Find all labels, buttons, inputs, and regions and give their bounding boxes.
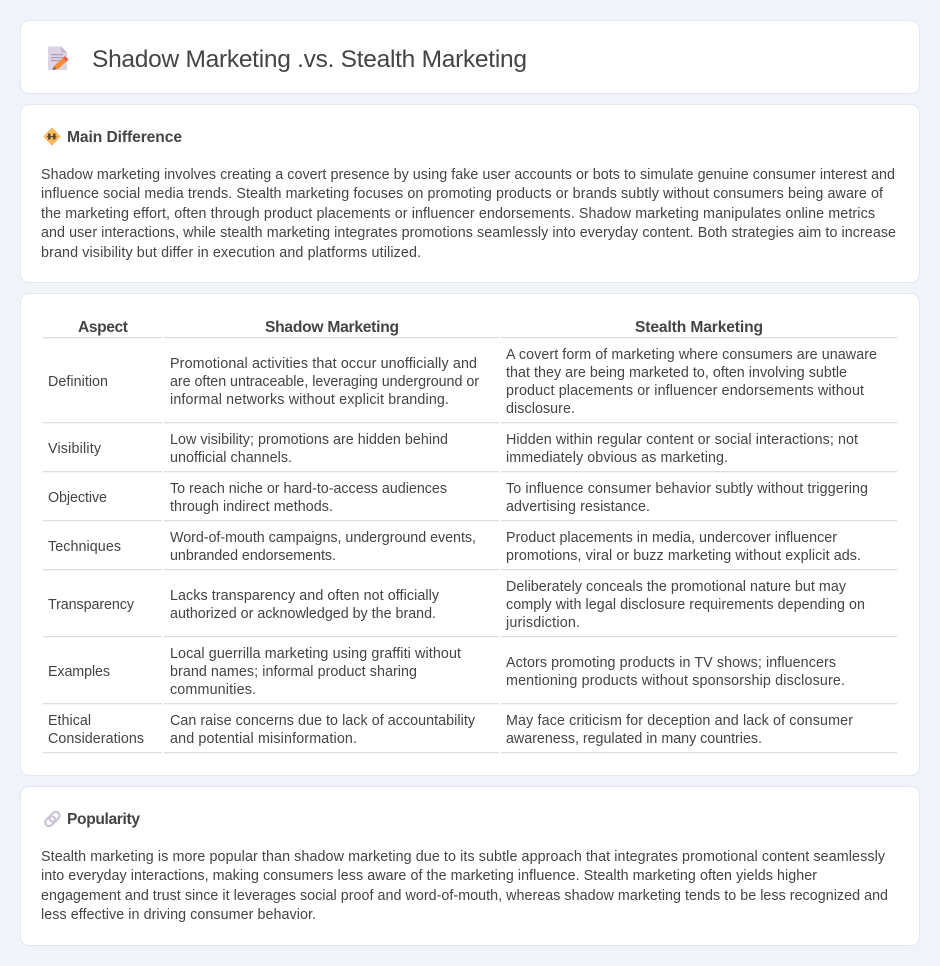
row: techniques: unbranded endorsements. (170, 548, 336, 564)
text block: popularity paragraph: into everyday interactions, making consumers less aware of the marketing influence. Stealth marketing often yields higher (41, 868, 817, 884)
panel: popularity (20, 786, 920, 946)
text block: popularity paragraph: engagement and trust since it leverages social proof and word-of-mouth, whereas shadow marketing tends to be less recognized and (41, 888, 888, 904)
row: definition: disclosure. (506, 401, 575, 417)
row: transparency: authorized or acknowledged by the brand. (170, 606, 436, 622)
icon: document with pencil (48, 46, 68, 70)
text block: main difference paragraph: brand visibility but differ in execution and platforms utilized. (41, 245, 421, 261)
row: techniques: Techniques (48, 539, 121, 555)
text block: main difference paragraph: influence social media trends. Stealth marketing focuses on promoting products or brands subtly without consumers being aware of (41, 186, 883, 202)
row: objective: To influence consumer behavior subtly without triggering (506, 481, 868, 497)
row: ethical considerations: awareness, regulated in many countries. (506, 731, 762, 747)
text block: main difference paragraph: the marketing effort, often through product placements or influencer endorsements. Shadow marketing manipulates online metrics (41, 206, 875, 222)
row: examples: mentioning products without sponsorship disclosure. (506, 673, 845, 689)
panel: title header (20, 20, 920, 94)
row: objective: To reach niche or hard-to-access audiences (170, 481, 447, 497)
icon: warning diamond (44, 128, 60, 145)
text block: popularity paragraph: Stealth marketing is more popular than shadow marketing due to its subtle approach that integrates promotional content seamlessly (41, 849, 886, 865)
row: examples (43, 646, 897, 704)
table header row: Aspect (78, 319, 128, 336)
row: definition: Promotional activities that occur unofficially and (170, 356, 477, 372)
row: visibility: immediately obvious as marketing. (506, 450, 728, 466)
text block: main difference paragraph: Shadow marketing involves creating a covert presence by using fake user accounts or bots to simulate genuine consumer interest and (41, 167, 895, 183)
row: transparency: comply with legal disclosure requirements depending on (506, 597, 865, 613)
row: visibility: Visibility (48, 441, 102, 457)
row: examples: Examples (48, 664, 110, 680)
panel: comparison table (20, 294, 920, 776)
row: objective (43, 481, 897, 521)
row: transparency (43, 579, 897, 637)
table header row: Shadow Marketing (265, 319, 399, 336)
row: techniques: Word-of-mouth campaigns, underground events, (170, 530, 476, 546)
row: ethical considerations (43, 713, 897, 753)
row: objective: advertising resistance. (506, 499, 650, 515)
row: ethical considerations: Can raise concerns due to lack of accountability (170, 713, 476, 729)
row: objective: Objective (48, 490, 107, 506)
row: definition: informal networks without explicit branding. (170, 392, 449, 408)
row: visibility: Hidden within regular content or social interactions; not (506, 432, 858, 448)
row: visibility: Low visibility; promotions are hidden behind (170, 432, 448, 448)
row: definition: that they are being marketed to, often involving subtle (506, 365, 847, 381)
text block: popularity paragraph (41, 849, 888, 923)
row: transparency: jurisdiction. (505, 615, 580, 631)
panel: main difference (20, 104, 920, 282)
row: definition: A covert form of marketing where consumers are unaware (506, 347, 877, 363)
icon: chain link (44, 810, 61, 828)
row: definition (43, 347, 897, 423)
row: ethical considerations: Ethical (48, 713, 91, 729)
row: visibility (43, 432, 897, 472)
row: examples: Actors promoting products in TV shows; influencers (506, 655, 836, 671)
row: ethical considerations: Considerations (48, 731, 144, 747)
row: definition: Definition (48, 374, 108, 390)
title: Shadow Marketing .vs. Stealth Marketing (92, 46, 527, 73)
text block: popularity paragraph: less effective in driving consumer behavior. (41, 907, 316, 923)
text block: main difference paragraph (41, 167, 896, 261)
row: transparency: Lacks transparency and often not officially (170, 588, 440, 604)
heading: popularity: Popularity (67, 811, 140, 828)
row: transparency: Transparency (48, 597, 135, 613)
text block: main difference paragraph: and user interactions, while stealth marketing integrates promotions seamlessly into everyday content. Both strategies aim to increase (41, 225, 896, 241)
row: ethical considerations: May face criticism for deception and lack of consumer (506, 713, 853, 729)
row: techniques: Product placements in media, undercover influencer (506, 530, 837, 546)
row: ethical considerations: and potential misinformation. (170, 731, 357, 747)
row: visibility: unofficial channels. (170, 450, 292, 466)
table header row: Stealth Marketing (635, 319, 763, 336)
row: examples: communities. (170, 682, 256, 698)
row: examples: Local guerrilla marketing using graffiti without (170, 646, 461, 662)
row: techniques (43, 530, 897, 570)
row: definition: product placements or influencer endorsements without (506, 383, 864, 399)
row: transparency: Deliberately conceals the promotional nature but may (506, 579, 847, 595)
row: techniques: promotions, viral or buzz marketing without explicit ads. (506, 548, 861, 564)
row: examples: brand names; informal product sharing (170, 664, 417, 680)
row: objective: through indirect methods. (170, 499, 333, 515)
table header row (43, 319, 897, 338)
heading: main difference: Main Difference (67, 129, 182, 146)
row: definition: are often untraceable, leveraging underground or (170, 374, 479, 390)
